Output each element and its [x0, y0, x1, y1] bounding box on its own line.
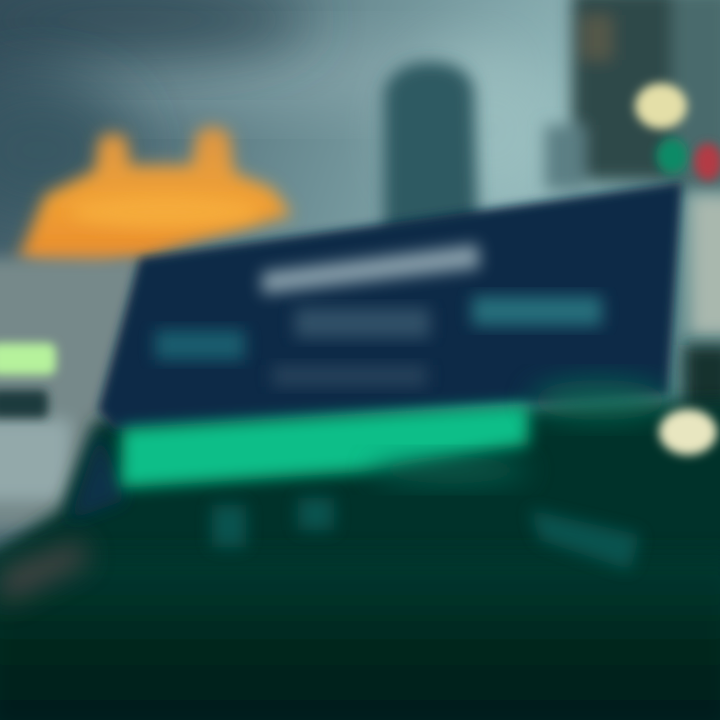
right pale strip [690, 195, 720, 335]
left label [155, 330, 245, 360]
billboard panel [98, 182, 682, 430]
tower: centre [384, 62, 478, 240]
billboard heading [262, 244, 480, 294]
green window light [0, 343, 56, 375]
dark window [0, 390, 48, 418]
lower text [272, 365, 427, 387]
lights: street lamps [635, 83, 720, 455]
building: left grey facade [0, 258, 140, 528]
lower blurred teal marks [212, 498, 640, 570]
building: orange lit palace [18, 126, 292, 272]
middle text [295, 308, 430, 338]
pink street glow [0, 540, 90, 605]
right label [472, 296, 602, 326]
billboard green band [120, 380, 670, 488]
building: right dark tower [545, 0, 720, 190]
ground foliage [0, 400, 720, 720]
